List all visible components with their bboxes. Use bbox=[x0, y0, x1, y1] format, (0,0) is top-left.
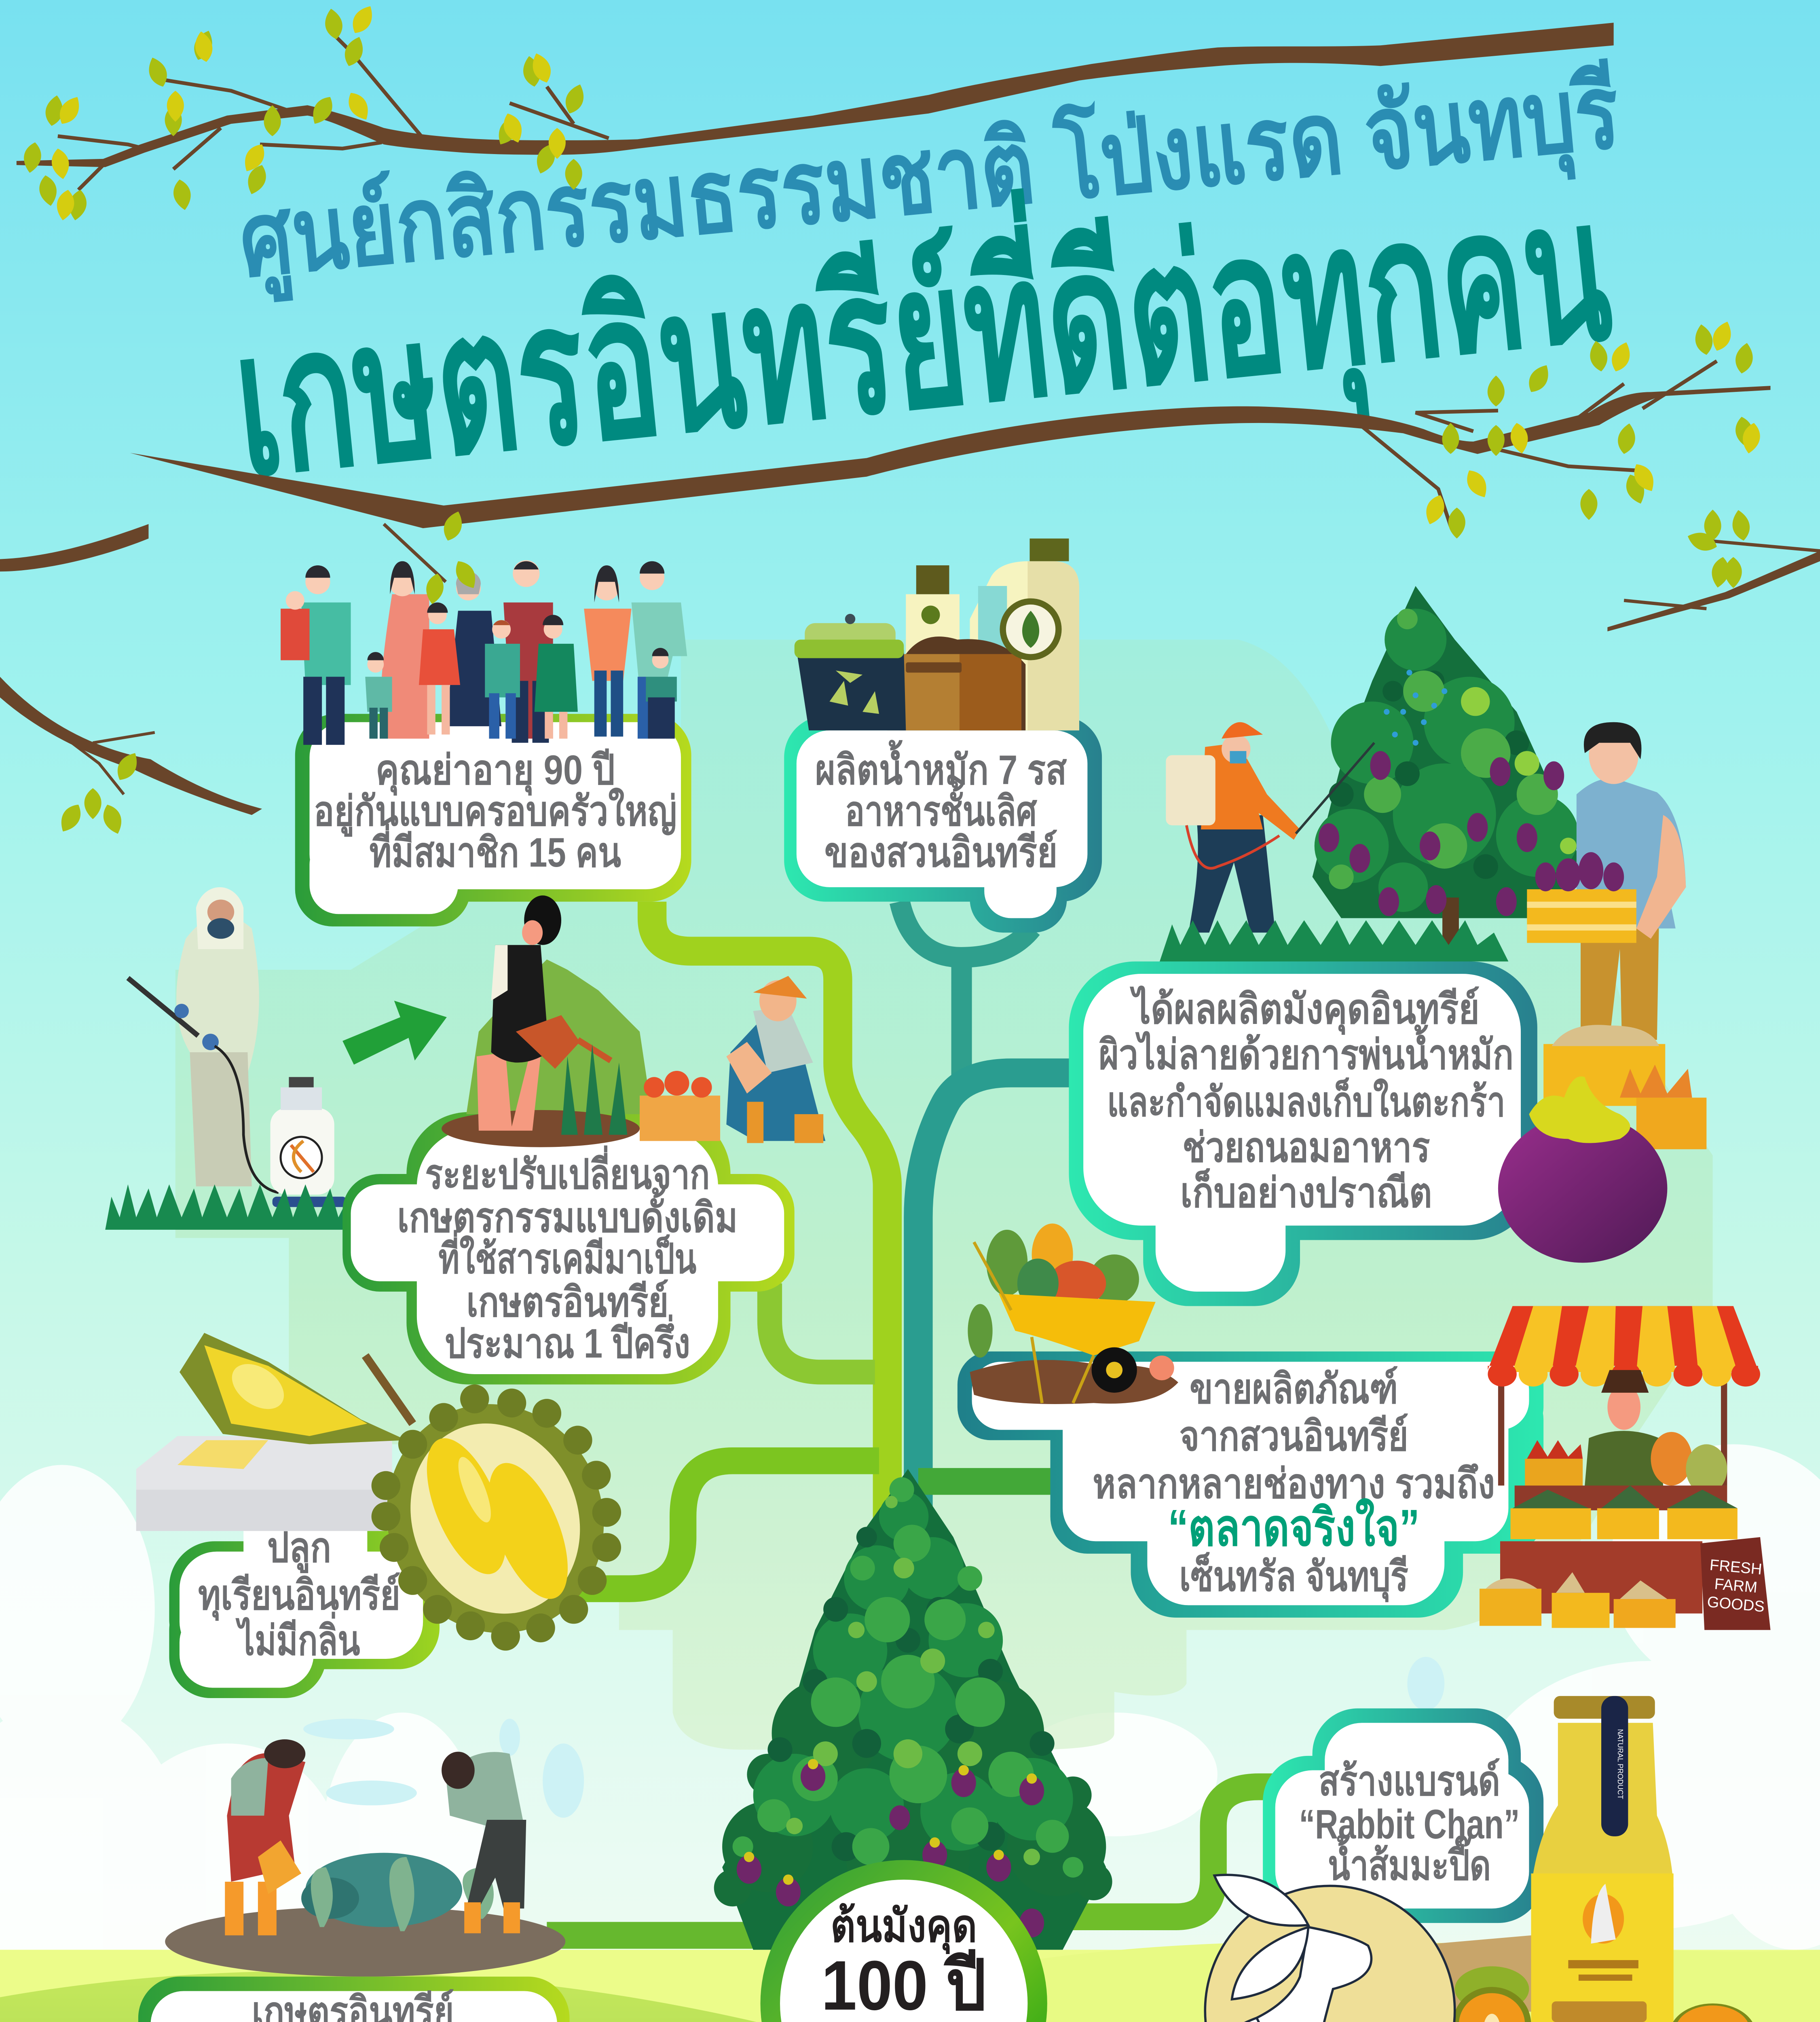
card: Rabbit Chan: “Rabbit Chan” bbox=[1299, 1801, 1520, 1847]
card: mangosteen results: และกำจัดแมลงเก็บในตะกร้า bbox=[1107, 1077, 1505, 1125]
card: market: เซ็นทรัล จันทบุรี bbox=[1179, 1552, 1408, 1603]
centre circle: 100-year mangosteen: ต้นมังคุด bbox=[831, 1900, 977, 1954]
connector: lime trunk from family card bbox=[652, 902, 887, 1568]
mini mangosteen tree bbox=[1313, 586, 1585, 955]
illustration: compost bin, box and bottles bbox=[795, 539, 1079, 730]
illustration: sprayer in white protective suit bbox=[128, 887, 347, 1207]
branch: right with leaves bbox=[1607, 509, 1820, 631]
illustration: wheelbarrow of vegetables bbox=[968, 1224, 1178, 1404]
illustration: durian bbox=[136, 1333, 638, 1666]
connector: link to durian bbox=[574, 1461, 879, 1589]
card: PGS bbox=[138, 1977, 569, 2022]
illustration: farmer with fruit crate bbox=[1527, 722, 1686, 1040]
card: mangosteen results: ช่วยถนอมอาหาร bbox=[1182, 1124, 1430, 1170]
card: durian: ปลูก bbox=[267, 1525, 331, 1574]
card: transition period: เกษตรอินทรีย์ bbox=[466, 1279, 668, 1325]
card: compost: อาหารชั้นเลิศ bbox=[845, 781, 1037, 834]
card: transition period: ที่ใช้สารเคมีมาเป็น bbox=[438, 1230, 696, 1282]
illustration: big family bbox=[281, 560, 687, 745]
illustration: organic farmers in plot bbox=[165, 1739, 565, 1977]
illustration: calamansi juice bottle and fruit bbox=[1436, 1696, 1779, 2022]
card: market bbox=[958, 1352, 1543, 1618]
card: market: จากสวนอินทรีย์ bbox=[1179, 1413, 1408, 1459]
illustration: market stall: FRESH bbox=[1709, 1556, 1763, 1578]
branch: left stub bbox=[0, 524, 148, 571]
branch: below title with twigs and leaves bbox=[130, 319, 1771, 539]
card: compost: ผลิตน้ำหมัก 7 รส bbox=[815, 740, 1067, 793]
card: durian: ไม่มีกลิ่น bbox=[235, 1612, 360, 1664]
background: small pale-blue clouds and bubbles bbox=[303, 1657, 1444, 1818]
connector: link to PGS card bbox=[547, 1933, 774, 1938]
illustration: market stall: FARM bbox=[1714, 1575, 1758, 1596]
background: pale tree silhouette bbox=[175, 640, 1713, 1750]
card: family: คุณย่าอายุ 90 ปี bbox=[376, 747, 615, 796]
card: family bbox=[295, 714, 691, 926]
card: transition period: เกษตรกรรมแบบดั้งเดิม bbox=[397, 1187, 738, 1241]
card: market: หลากหลายช่องทาง รวมถึง bbox=[1093, 1461, 1495, 1507]
card: Rabbit Chan bbox=[1263, 1708, 1543, 1923]
connector: lime link from transition card bbox=[769, 1283, 875, 1372]
card: transition period: ประมาณ 1 ปีครึ่ง bbox=[445, 1314, 690, 1366]
card: mangosteen results: ได้ผลผลิตมังคุดอินทรีย์ bbox=[1130, 986, 1480, 1035]
card: transition period: ระยะปรับเปลี่ยนจาก bbox=[425, 1145, 710, 1197]
connector: teal stem from compost card bbox=[900, 902, 1032, 1077]
connector: teal trunk to mangosteen card bbox=[918, 1073, 1077, 1527]
background: rolling hills bbox=[0, 1942, 1820, 2022]
card: transition period bbox=[342, 1112, 795, 1384]
illustration: grass under sprayer bbox=[105, 1184, 359, 1230]
branch: top with twigs and leaves bbox=[17, 2, 1614, 222]
card: compost bbox=[784, 716, 1102, 933]
illustration: farmer spraying bbox=[1166, 722, 1374, 933]
illustration: market stall: GOODS bbox=[1706, 1593, 1765, 1616]
connector: green link to market card bbox=[918, 1479, 1057, 1484]
connector: link to Rabbit Chan bbox=[1027, 1787, 1283, 1917]
card: mangosteen results bbox=[1069, 962, 1537, 1306]
main mangosteen tree bbox=[714, 1469, 1112, 1950]
card: family: ที่มีสมาชิก 15 คน bbox=[369, 823, 621, 876]
illustration: big mangosteen and baskets bbox=[1498, 1025, 1706, 1263]
card: market: ขายผลิตภัณฑ์ bbox=[1190, 1366, 1398, 1412]
centre circle: 100-year mangosteen bbox=[761, 1860, 1047, 2022]
illustration: calamansi juice bottle and fruit: NATURAL PRODUCT bbox=[1616, 1729, 1625, 1799]
card: Rabbit Chan: น้ำส้มมะปี๊ด bbox=[1328, 1835, 1491, 1889]
branch: small twig under left end with leaves bbox=[384, 509, 481, 605]
card: family: อยู่กันแบบครอบครัวใหญ่ bbox=[314, 788, 677, 837]
logo: Rabbit Chan mark bbox=[1178, 1875, 1455, 2022]
card: Rabbit Chan: สร้างแบรนด์ bbox=[1319, 1758, 1500, 1804]
background: white clouds bbox=[0, 1444, 1820, 2011]
card: mangosteen results: ผิวไม่ลายด้วยการพ่นน้ำหมัก bbox=[1099, 1024, 1513, 1078]
card: compost: ของสวนอินทรีย์ bbox=[824, 829, 1057, 876]
illustration: market stall bbox=[1480, 1306, 1771, 1630]
card: market: “ตลาดจริงใจ” bbox=[1168, 1498, 1420, 1557]
card: mangosteen results: เก็บอย่างปราณีต bbox=[1180, 1168, 1432, 1216]
card: durian bbox=[169, 1516, 440, 1698]
illustration: grass strip bbox=[1160, 920, 1508, 962]
icon: green arrow bbox=[342, 1000, 447, 1065]
branch: left lower with leaves bbox=[0, 677, 262, 837]
card: durian: ทุเรียนอินทรีย์ bbox=[198, 1572, 400, 1621]
illustration: gardener watering and farmer harvesting bbox=[442, 895, 825, 1147]
